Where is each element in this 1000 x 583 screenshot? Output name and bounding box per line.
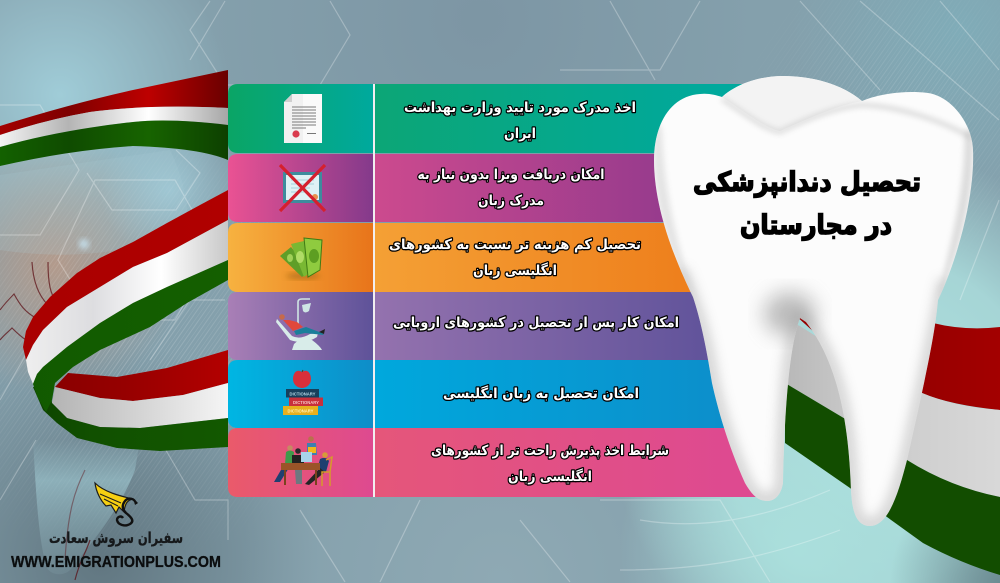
row 4: dental chair: [228, 292, 760, 360]
icon: large white tooth: [653, 76, 973, 526]
text: row 3: انگلیسی زبان: [473, 262, 557, 279]
text: row 5: امکان تحصیل به زبان انگلیسی: [443, 385, 639, 402]
title: تحصیل دندانپزشکی: [693, 167, 921, 198]
icon: apple on dictionaries: [283, 370, 323, 415]
text: row 2: امکان دریافت ویزا بدون نیاز به: [418, 167, 604, 183]
text: row 2: مدرک زبان: [478, 193, 544, 209]
icon: certificate document: [284, 94, 322, 143]
text: row 6: انگلیسی زبان: [508, 468, 592, 485]
row 1: document: [228, 84, 760, 153]
row 5: dictionaries: [228, 360, 760, 428]
title: [693, 167, 921, 241]
text: row 2: [418, 167, 604, 209]
icon: apple on dictionaries: DICTIONARY: [290, 392, 316, 396]
icon: apple on dictionaries: DICTIONARY: [293, 400, 319, 405]
website url: WWW.EMIGRATIONPLUS.COM: [11, 554, 221, 571]
ribbon: left flag ribbon: [0, 70, 228, 451]
icon: apple on dictionaries: DICTIONARY: [288, 408, 314, 414]
text: row 3: تحصیل کم هزینه تر نسبت به کشورهای: [389, 237, 641, 253]
ribbon: right flag ribbon: [785, 310, 1000, 575]
text: row 1: اخذ مدرک مورد تایید وزارت بهداشت: [404, 100, 636, 116]
row 2: no document: [228, 154, 760, 222]
text: row 3: [389, 237, 641, 279]
text: row 1: ایران: [504, 126, 536, 142]
icon: banknotes: [280, 238, 322, 279]
logo: winged swan emblem: [95, 483, 138, 525]
row 6: students: [228, 428, 760, 497]
icon: crossed certificate: [280, 165, 325, 211]
row 3: money: [228, 223, 760, 292]
icon: group of students at table: [274, 436, 332, 486]
title: در مجارستان: [740, 210, 892, 241]
text: row 6: [431, 443, 669, 485]
text: row 1: [404, 100, 636, 142]
panel: six benefit rows: [228, 84, 760, 497]
logo: company name: سفیران سروش سعادت: [49, 529, 183, 547]
text: row 4: امکان کار پس از تحصیل در کشورهای اروپایی: [393, 315, 679, 331]
root edge shading: [680, 270, 945, 526]
text: row 6: شرایط اخذ پذیرش راحت تر از کشورهای: [431, 443, 669, 459]
icon: patient in dental chair: [276, 299, 325, 350]
